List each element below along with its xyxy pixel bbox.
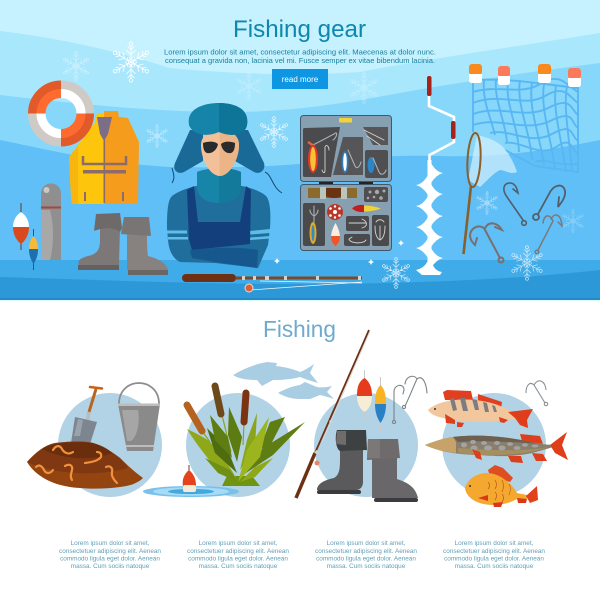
- icon: snowflake 1: [62, 52, 90, 80]
- icon: snowflake 6: [349, 73, 379, 103]
- intro text block: [164, 48, 436, 65]
- net float 1: [469, 64, 482, 83]
- icon: pike fish: [425, 432, 568, 463]
- panel: backing circle 2: [186, 393, 290, 497]
- text block: caption 2: [187, 540, 289, 570]
- text block: caption 3: massa. Cum sociis natoque: [327, 563, 406, 570]
- lures in bottom tray: [310, 190, 386, 246]
- text block: caption 2: Lorem ipsum dolor sit amet,: [199, 540, 278, 547]
- text block: caption 4: Lorem ipsum dolor sit amet,: [455, 540, 534, 547]
- lures in top tray: [308, 130, 386, 174]
- text block: caption 1: massa. Cum sociis natoque: [71, 563, 150, 570]
- panel: backing circle 1: [58, 393, 162, 497]
- icon: thermos: [41, 184, 61, 260]
- text block: caption 2: massa. Cum sociis natoque: [199, 563, 278, 570]
- icon: fishing net: [469, 64, 581, 172]
- overalls: [187, 186, 251, 250]
- jacket stripes: [167, 229, 270, 240]
- icon: snowflake 10: [562, 209, 584, 233]
- text block: caption 3: consectetuer adipiscing elit. Aenean: [315, 548, 417, 555]
- icon: water ripple: [143, 486, 239, 497]
- icon: sparkles: [274, 240, 404, 265]
- title: Fishing gear: Fishing gear: [233, 16, 366, 43]
- icon: snowflake 3: [146, 124, 168, 148]
- text block: caption 4: commodo ligula eget dolor. Aenean: [444, 556, 544, 562]
- icon: bucket: [118, 383, 160, 451]
- text block: caption 3: commodo ligula eget dolor. Aenean: [316, 556, 416, 562]
- worm 1: [53, 446, 73, 453]
- text block: caption 3: [315, 540, 417, 570]
- figure: ice fisherman: [167, 103, 282, 268]
- hat strings: [172, 168, 282, 193]
- intro text block: Lorem ipsum dolor sit amet, consectetur adipiscing elit. Maecenas at dolor nunc.: [164, 48, 436, 56]
- scarf: [197, 168, 241, 203]
- icon: dark rubber boots: [317, 430, 418, 502]
- button: read more: [272, 69, 328, 89]
- worm 3: [36, 466, 53, 473]
- sunglasses: [203, 142, 235, 153]
- worm 2: [85, 452, 101, 463]
- icon: snowflake 8: [476, 191, 498, 215]
- hat: [189, 103, 247, 135]
- face: [201, 130, 239, 176]
- icon: snowflake 7: [381, 258, 411, 288]
- icon: blue float: [29, 229, 38, 270]
- intro text block: consequat a gravida non, lacinia vel mi. Fusce semper ex vitae bibendum lacinia.: [165, 56, 435, 65]
- icon: red and white float: [357, 370, 372, 420]
- icon: perch fish: [428, 390, 533, 428]
- icon: grey boots: [78, 213, 168, 275]
- jacket: [167, 186, 270, 268]
- text block: caption 1: commodo ligula eget dolor. Aenean: [60, 556, 160, 562]
- panel: winter banner background: [0, 0, 600, 301]
- panel: backing circle 3: [314, 393, 418, 497]
- icon: bobber on water: [183, 465, 196, 492]
- icon: life ring: [32, 85, 90, 142]
- worm 5: [106, 466, 117, 483]
- title: Fishing: Fishing: [263, 316, 336, 342]
- icon: single hook large: [533, 186, 565, 220]
- panel: backing circle 4: [442, 393, 546, 497]
- icon: silhouette fish small: [278, 382, 334, 399]
- icon: ice auger: [416, 76, 456, 275]
- icon: snowflake 5: [259, 117, 289, 147]
- text block: caption 4: [443, 540, 545, 570]
- icon: goldfish: [465, 465, 538, 507]
- icon: hook near fish: [526, 381, 548, 406]
- icon: life vest: [69, 111, 139, 204]
- text block: caption 4: consectetuer adipiscing elit. Aenean: [443, 548, 545, 555]
- text block: caption 1: consectetuer adipiscing elit. Aenean: [59, 548, 161, 555]
- icon: dirt mound with worms: [27, 442, 143, 489]
- icon: fishing rod: [182, 274, 362, 292]
- ear flaps: [174, 130, 264, 173]
- net float 2: [498, 66, 510, 85]
- icon: red float: [13, 203, 29, 250]
- icon: cattails and reeds: [187, 386, 305, 486]
- icon: yellow and blue float: [375, 377, 386, 432]
- icon: hooks in circle 3: [392, 376, 427, 424]
- icon: snowflake 4: [236, 73, 262, 99]
- worm 4: [65, 465, 72, 480]
- icon: treble hook right: [535, 215, 562, 254]
- icon: treble hook left: [470, 223, 504, 262]
- text block: caption 2: consectetuer adipiscing elit. Aenean: [187, 548, 289, 555]
- text block: caption 4: massa. Cum sociis natoque: [455, 563, 534, 570]
- net float 3: [538, 64, 551, 83]
- text block: caption 1: Lorem ipsum dolor sit amet,: [71, 540, 150, 547]
- button: read more: read more: [282, 75, 319, 84]
- text block: caption 3: Lorem ipsum dolor sit amet,: [327, 540, 406, 547]
- panel: tackle box: [300, 116, 392, 250]
- icon: snowflake 9: [510, 246, 544, 280]
- icon: shovel: [71, 387, 102, 444]
- icon: snowflake 2: [111, 42, 151, 82]
- icon: landing net: [464, 133, 517, 254]
- icon: long fishing rod: [296, 330, 370, 498]
- text block: caption 2: commodo ligula eget dolor. Aenean: [188, 556, 288, 562]
- net float 4: [568, 68, 581, 87]
- crossed arm: [190, 248, 258, 268]
- icon: single hook dark: [504, 183, 526, 225]
- text block: caption 1: [59, 540, 161, 570]
- icon: silhouette fish large: [233, 362, 318, 386]
